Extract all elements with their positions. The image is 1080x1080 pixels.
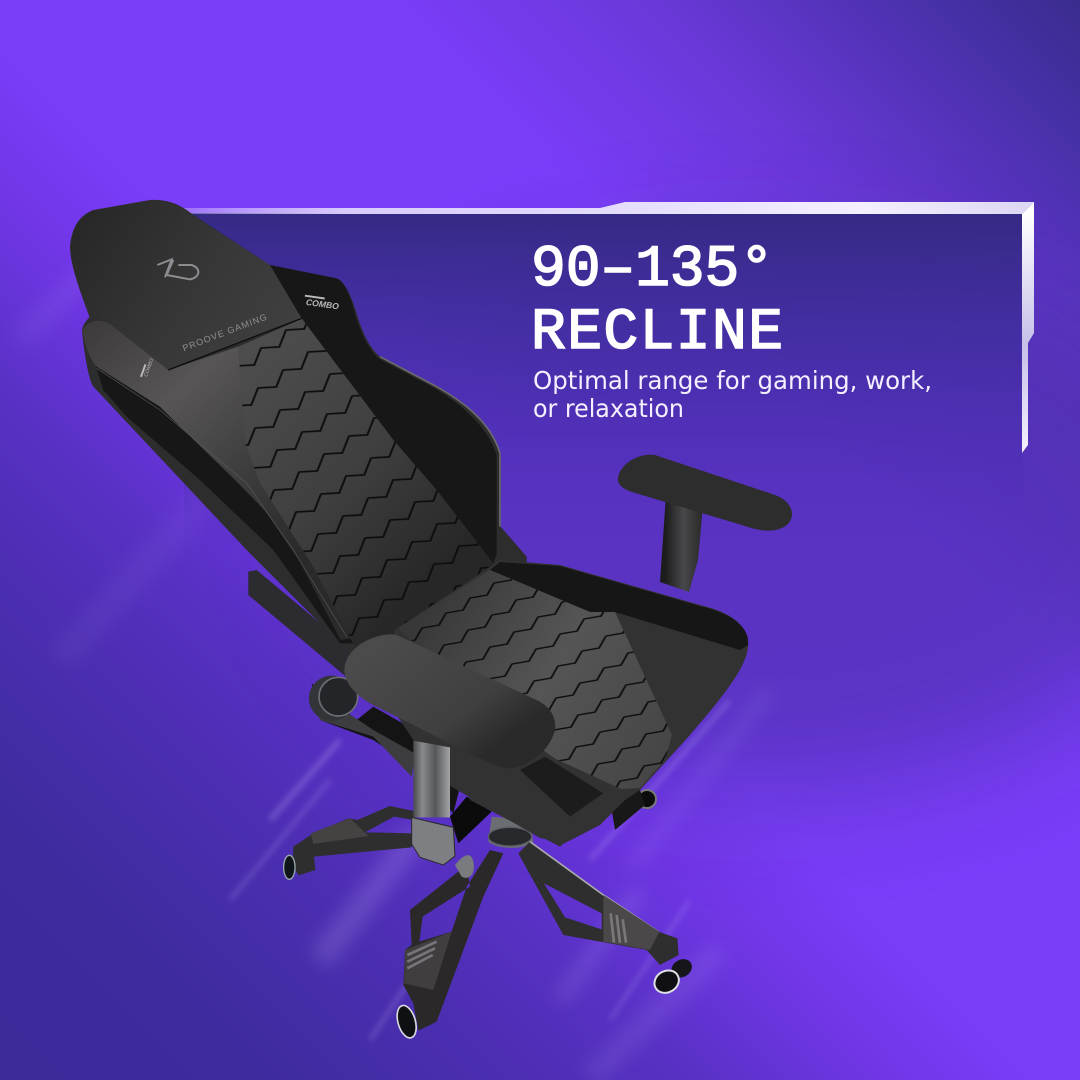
seat side under arm: [450, 753, 623, 847]
heading: RECLINE: [531, 301, 783, 366]
right leg: [518, 842, 679, 965]
chair illustration: [70, 200, 792, 1040]
recline slider: [248, 570, 360, 680]
backrest: [70, 200, 527, 680]
side badge: [140, 357, 155, 380]
description text: [533, 366, 932, 423]
combo badge: COMBO: [305, 297, 340, 312]
seat plate: [450, 797, 492, 843]
seat: [380, 560, 748, 843]
right caster: [650, 955, 695, 997]
glass frame top bar: [182, 202, 1034, 214]
mid-curve bracket: [455, 855, 474, 878]
back zigzag stitching: [238, 318, 493, 657]
arm post collar: [412, 817, 455, 865]
right leg pad: [603, 895, 659, 950]
glass panel: [182, 202, 1034, 560]
front leg: [403, 850, 503, 1031]
wing highlight: [380, 357, 500, 527]
brand text: PROOVE GAMING: [181, 311, 269, 353]
left leg: [293, 806, 417, 875]
background shade behind panel: [320, 250, 1080, 790]
mechanism: [312, 683, 467, 813]
seat cushion: [398, 570, 672, 790]
arm post: [413, 741, 450, 817]
left leg pad: [311, 818, 368, 844]
back cushion: [238, 318, 493, 657]
front leg pad: [404, 932, 452, 990]
backrest silhouette: [70, 200, 527, 657]
gas lift: [488, 817, 533, 848]
brand logo mark: [157, 259, 198, 279]
arm pad: [344, 634, 555, 768]
head section: [71, 201, 302, 370]
description text: or relaxation: [533, 394, 684, 423]
front caster: [394, 1003, 420, 1040]
side stripe: [520, 757, 603, 817]
left caster: [284, 855, 295, 879]
heading: 90–135°: [531, 238, 774, 303]
pivot knob: [309, 676, 358, 721]
black side strip: [96, 367, 353, 643]
glass frame right bar: [1022, 202, 1034, 453]
stitch line: [97, 368, 347, 637]
side badge: COMBO: [143, 358, 155, 378]
description text: Optimal range for gaming, work,: [533, 366, 932, 395]
motion streaks: [20, 240, 770, 1078]
heading: [531, 238, 783, 366]
hub collar: [488, 827, 532, 846]
seat body: [380, 560, 748, 843]
right inner wing: [270, 265, 497, 563]
far armrest: [618, 455, 792, 592]
seat zigzag stitching: [398, 570, 672, 790]
near armrest: [344, 634, 623, 865]
seam: [168, 318, 302, 370]
rear bolster: [490, 562, 748, 650]
far caster: [610, 790, 656, 830]
panel fill: [184, 213, 1023, 560]
chair base: [284, 676, 695, 1040]
grey wing: [83, 321, 351, 640]
